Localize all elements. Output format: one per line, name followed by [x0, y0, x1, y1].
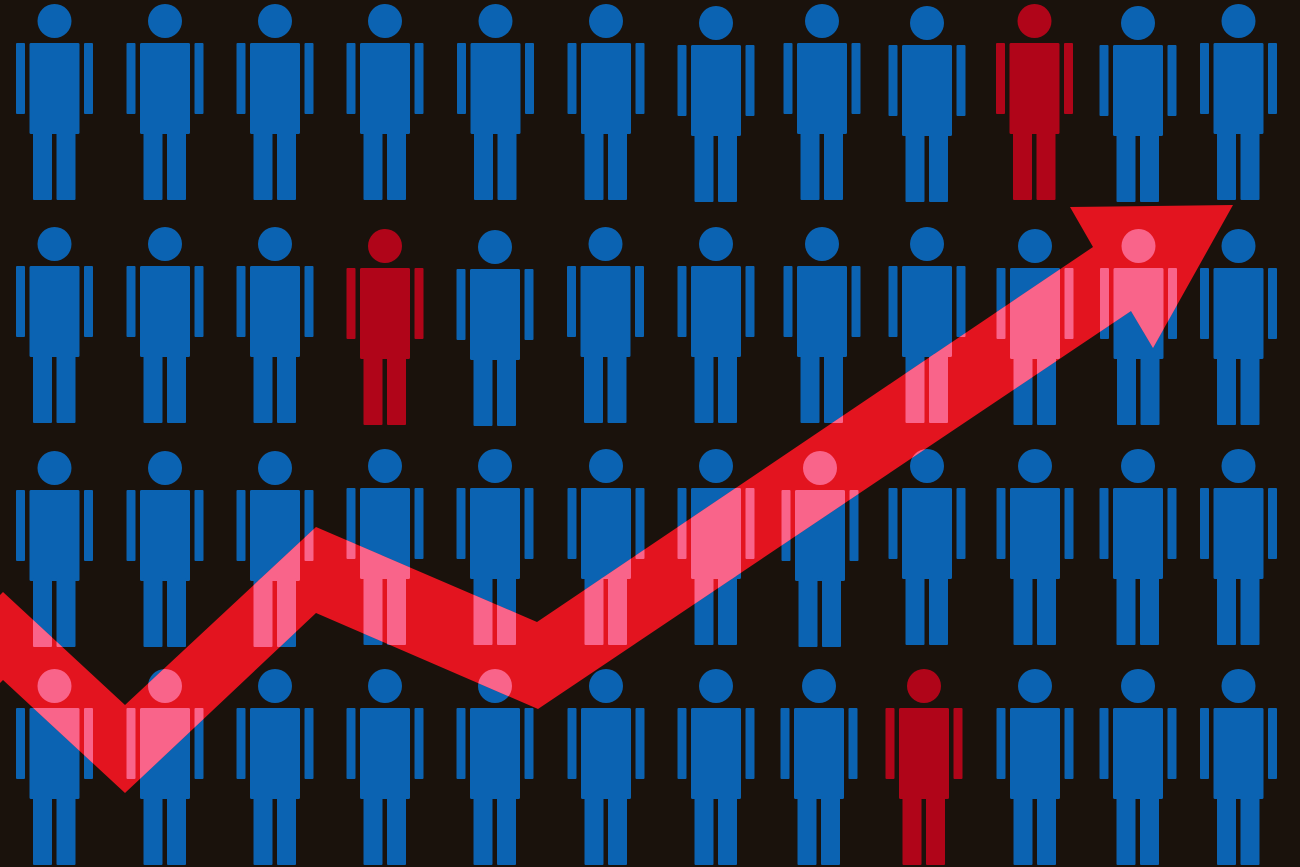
red figure, row 4	[886, 669, 962, 865]
row 2 of figures	[16, 227, 1277, 426]
red figure, row 2	[346, 229, 424, 425]
figures showing through the arrow	[33, 229, 1177, 779]
row 3 of figures	[16, 449, 1277, 647]
row 4 of figures	[16, 669, 1277, 865]
rising red arrow	[0, 205, 1233, 793]
red figure, row 1	[996, 4, 1073, 200]
row 1 of figures	[16, 4, 1277, 202]
